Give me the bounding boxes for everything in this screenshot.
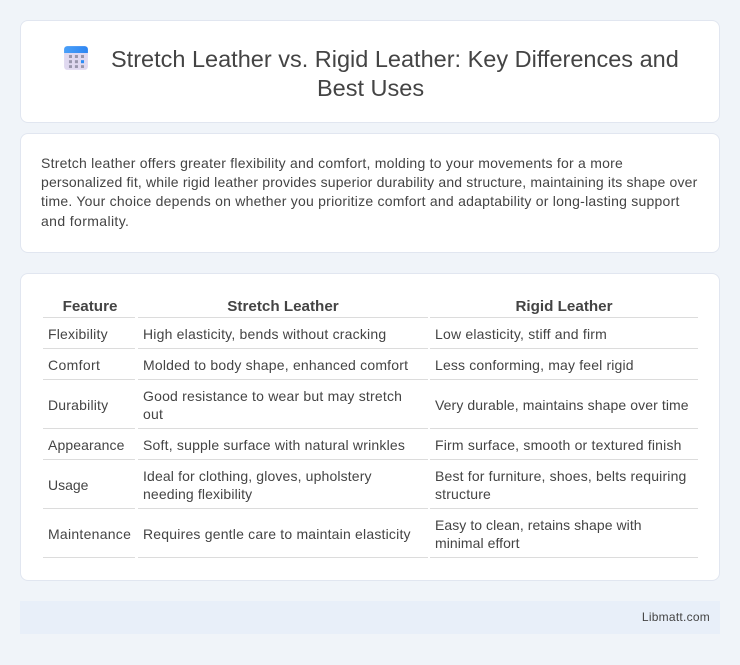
row: maintenance: Easy to clean, retains shape with <box>435 517 642 533</box>
panel: comparison table <box>20 273 720 581</box>
table header <box>63 298 613 315</box>
row: maintenance <box>48 517 642 551</box>
title <box>111 46 679 101</box>
row: durability: Durability <box>48 397 108 413</box>
row: usage <box>48 468 686 502</box>
panel: introduction <box>20 133 720 253</box>
introduction text: personalized fit, while rigid leather provides superior durability and structure, maintaining its shape over <box>41 174 697 190</box>
row: appearance <box>48 437 682 453</box>
table header: Feature <box>63 298 117 315</box>
row: usage: Best for furniture, shoes, belts requiring <box>435 468 686 484</box>
table header: Rigid Leather <box>515 298 613 315</box>
row: comfort: Comfort <box>48 357 100 373</box>
row: usage: Usage <box>48 477 88 493</box>
row: usage: structure <box>435 486 491 502</box>
row: flexibility: Flexibility <box>48 326 108 342</box>
panel: title <box>20 20 720 123</box>
row: maintenance: Requires gentle care to maintain elasticity <box>143 526 411 542</box>
icon: calendar <box>64 46 88 70</box>
title: Best Uses <box>317 75 424 101</box>
row: flexibility: Low elasticity, stiff and firm <box>435 326 607 342</box>
row: flexibility: High elasticity, bends without cracking <box>143 326 386 342</box>
introduction text: Stretch leather offers greater flexibility and comfort, molding to your movements for a more <box>41 155 623 171</box>
title: Stretch Leather vs. Rigid Leather: Key Differences and <box>111 46 679 72</box>
row: appearance: Appearance <box>48 437 125 453</box>
row: durability: Very durable, maintains shape over time <box>435 397 689 413</box>
row: comfort: Molded to body shape, enhanced comfort <box>143 357 408 373</box>
row: comfort <box>48 357 634 373</box>
table header: Stretch Leather <box>227 298 339 315</box>
row lines <box>43 317 698 558</box>
row: maintenance: minimal effort <box>435 535 520 551</box>
introduction text: and formality. <box>41 213 129 229</box>
introduction text <box>41 155 698 229</box>
row: durability <box>48 388 689 422</box>
row: durability: Good resistance to wear but may stretch <box>143 388 402 404</box>
row: flexibility <box>48 326 607 342</box>
row: appearance: Firm surface, smooth or textured finish <box>435 437 682 453</box>
footer bar <box>20 601 720 634</box>
footer credit: Libmatt.com <box>642 610 710 624</box>
row: appearance: Soft, supple surface with natural wrinkles <box>143 437 405 453</box>
row: usage: needing flexibility <box>143 486 252 502</box>
row: comfort: Less conforming, may feel rigid <box>435 357 634 373</box>
row: usage: Ideal for clothing, gloves, upholstery <box>143 468 372 484</box>
introduction text: time. Your choice depends on whether you prioritize comfort and adaptability or long-lasting support <box>41 193 680 209</box>
row: maintenance: Maintenance <box>48 526 131 542</box>
row: durability: out <box>143 406 163 422</box>
